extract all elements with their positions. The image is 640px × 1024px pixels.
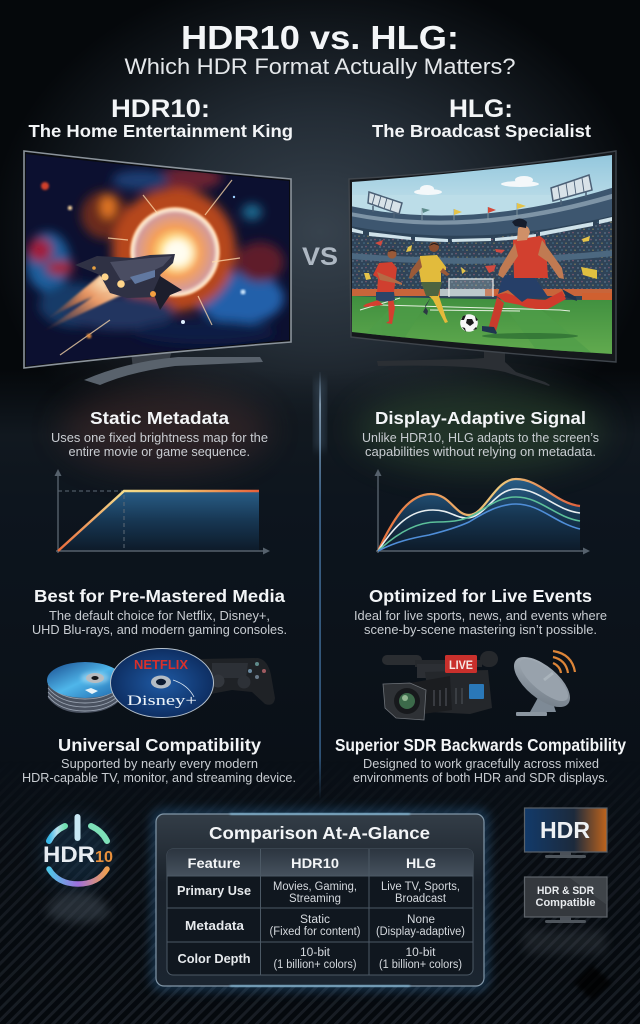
- logo: HDR10: [41, 816, 113, 922]
- icon: HDR and SDR compatible monitor: [524, 877, 607, 954]
- table: [167, 849, 473, 975]
- row: color depth: [178, 947, 462, 971]
- section: Universal Compatibility: HDR-capable TV, monitor, and streaming device.: [22, 770, 296, 785]
- row: metadata: [185, 914, 465, 938]
- section: Display-Adaptive Signal: [362, 408, 599, 459]
- TV stand left: [84, 350, 263, 385]
- section: Static Metadata: entire movie or game sequence.: [68, 444, 250, 459]
- section: Superior SDR Backwards Compatibility: [335, 735, 626, 785]
- section: Static Metadata: Uses one fixed brightness map for the: [51, 430, 268, 445]
- heading: HLG: HLG:: [449, 95, 513, 123]
- heading: HDR10: The Home Entertainment King: [28, 121, 293, 141]
- row: primary use: Movies, Gaming,: [273, 881, 357, 893]
- streaming disc: [110, 648, 214, 718]
- row: metadata: Metadata: [185, 918, 245, 933]
- row: primary use: Broadcast: [395, 893, 447, 905]
- football: [460, 314, 478, 332]
- section: Optimized for Live Events: Ideal for live sports, news, and events where: [354, 608, 607, 623]
- section: Static Metadata: [51, 408, 268, 459]
- TV: HLG football scene: [345, 150, 620, 386]
- icon: satellite dish: [506, 648, 578, 716]
- game controller: [200, 658, 275, 705]
- flags: [422, 203, 526, 220]
- chart: adaptive curves: [374, 469, 590, 554]
- player yellow: [409, 242, 450, 323]
- section: Best for Pre-Mastered Media: [32, 586, 287, 637]
- section: Display-Adaptive Signal: Display-Adaptive Signal: [375, 408, 586, 428]
- section: Display-Adaptive Signal: capabilities without relying on metadata.: [365, 444, 596, 459]
- row: metadata: Static: [300, 914, 330, 926]
- heading: HLG: [372, 95, 591, 141]
- table header: HLG: [406, 855, 436, 871]
- section: Superior SDR Backwards Compatibility: Designed to work gracefully across mixed: [363, 756, 599, 771]
- monitor reflection: [524, 930, 606, 954]
- section: Optimized for Live Events: Optimized for Live Events: [369, 586, 592, 606]
- icon: HDR monitor: [524, 808, 607, 858]
- section: Universal Compatibility: Supported by nearly every modern: [61, 756, 258, 771]
- streaming disc: NETFLIX: [134, 657, 188, 672]
- TV: HDR10 space scene: [20, 145, 295, 385]
- row: primary use: Primary Use: [177, 883, 251, 898]
- icon: HDR and SDR compatible monitor: Compatible: [536, 897, 596, 909]
- Blu-ray stack: [47, 662, 123, 713]
- section: Universal Compatibility: Universal Compatibility: [58, 735, 261, 755]
- row: primary use: Live TV, Sports,: [381, 881, 460, 893]
- panel title: Comparison At-A-Glance: [209, 823, 430, 843]
- centre divider: [316, 372, 324, 800]
- floodlights: [368, 175, 592, 218]
- row: metadata: (Fixed for content): [270, 926, 361, 938]
- icon: HDR and SDR compatible monitor: HDR & SDR: [537, 885, 594, 897]
- player large red: [482, 218, 578, 339]
- section: Best for Pre-Mastered Media: Best for Pre-Mastered Media: [34, 586, 285, 606]
- chart: static tone curve: [54, 469, 270, 554]
- section: Optimized for Live Events: [354, 586, 607, 637]
- row: color depth: (1 billion+ colors): [379, 959, 462, 971]
- VS label: VS: [302, 243, 338, 271]
- logo: HDR10: 10: [95, 849, 113, 866]
- streaming disc: Disney+: [127, 693, 197, 709]
- crowd flags: [364, 236, 597, 280]
- player small red: [363, 249, 402, 324]
- table header: Feature: [188, 855, 241, 871]
- goal: [449, 279, 493, 297]
- logo: HDR10: HDR: [43, 842, 95, 867]
- spaceship: [75, 254, 182, 310]
- section: Superior SDR Backwards Compatibility: environments of both HDR and SDR displays.: [353, 770, 608, 785]
- section: Static Metadata: Static Metadata: [90, 408, 229, 428]
- TV stand right: [377, 345, 550, 386]
- screen: explosion: [26, 154, 289, 366]
- section: Universal Compatibility: [22, 735, 296, 785]
- row: primary use: Streaming: [289, 893, 341, 905]
- screen: stadium: [352, 155, 612, 354]
- row: color depth: (1 billion+ colors): [274, 959, 357, 971]
- icon: broadcast camera: [382, 651, 498, 720]
- heading: HDR10: HDR10:: [111, 95, 210, 123]
- heading: HDR10: [28, 95, 293, 141]
- row: color depth: 10-bit: [300, 947, 331, 959]
- LIVE tally: LIVE: [449, 660, 473, 672]
- icon: media discs and controller: [47, 648, 275, 718]
- row: color depth: Color Depth: [178, 951, 251, 966]
- panel: comparison table: [150, 808, 490, 992]
- row: primary use: [177, 881, 460, 905]
- heading: HLG: The Broadcast Specialist: [372, 121, 591, 141]
- logo reflection: [46, 892, 110, 922]
- section: Display-Adaptive Signal: Unlike HDR10, HLG adapts to the screen’s: [362, 430, 599, 445]
- subtitle: Which HDR Format Actually Matters?: [124, 54, 516, 79]
- section: Best for Pre-Mastered Media: The default choice for Netflix, Disney+,: [49, 608, 270, 623]
- table header: [188, 855, 436, 871]
- row: metadata: (Display-adaptive): [376, 926, 465, 938]
- section: Optimized for Live Events: scene-by-scene mastering isn’t possible.: [364, 622, 597, 637]
- icon: HDR monitor: HDR: [540, 817, 590, 843]
- clouds: [414, 176, 539, 195]
- title: HDR10 vs. HLG:: [181, 20, 459, 57]
- section: Best for Pre-Mastered Media: UHD Blu-rays, and modern gaming consoles.: [32, 622, 287, 637]
- row: color depth: 10-bit: [406, 947, 436, 959]
- table header: HDR10: [291, 855, 339, 871]
- row: metadata: None: [407, 914, 435, 926]
